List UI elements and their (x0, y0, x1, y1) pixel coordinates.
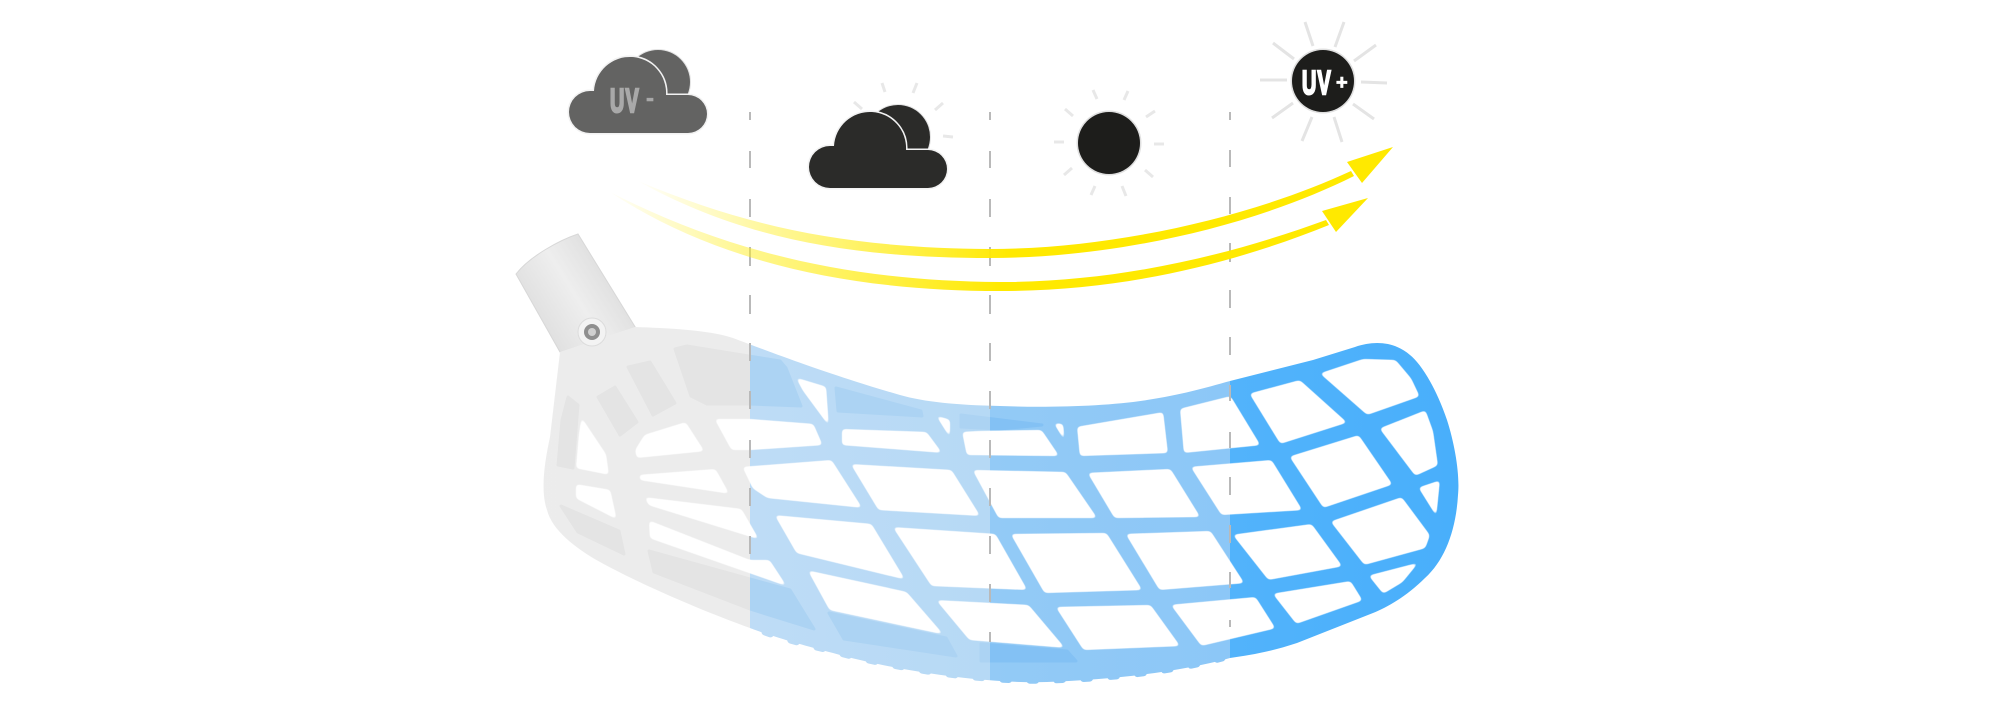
blade mesh openings (575, 358, 1441, 651)
arrow: lower UV ray (610, 192, 1368, 291)
arrow: upper UV ray (638, 147, 1393, 258)
icon: sun (1054, 90, 1164, 196)
blade neck (516, 234, 637, 362)
divider 2 (989, 112, 991, 642)
UV- label: UV (610, 82, 640, 119)
UV+ label: + (1336, 72, 1348, 94)
UV- label: - (646, 85, 654, 112)
icon: UV- cloud (569, 50, 707, 133)
UV- label (610, 82, 654, 119)
sun rays (1054, 90, 1164, 196)
zone divider lines (750, 112, 1230, 642)
blade silhouette with UV colour zones (544, 327, 1458, 682)
recessed panels (558, 346, 1076, 661)
sun rays (854, 83, 953, 137)
divider 3 (1229, 112, 1231, 627)
blade bottom teeth (765, 632, 1222, 680)
icon: UV+ sun (1260, 22, 1387, 142)
neck screw (578, 318, 606, 346)
divider 1 (749, 112, 751, 554)
UV+ label: UV (1302, 64, 1332, 101)
UV+ label (1302, 64, 1348, 101)
floorball blade (516, 234, 1458, 682)
sun rays (1260, 22, 1387, 142)
icon: cloud with sun (809, 83, 953, 188)
